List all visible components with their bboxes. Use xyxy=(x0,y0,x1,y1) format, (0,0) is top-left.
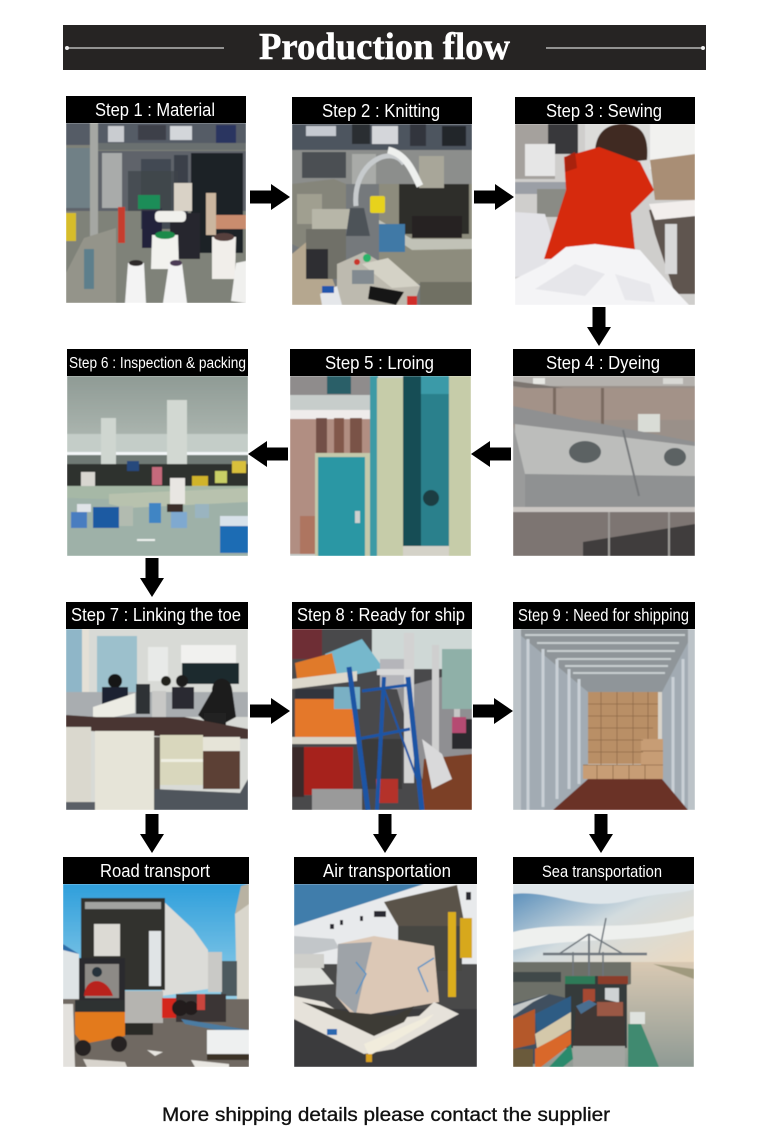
arrow: step 2 to step 3 xyxy=(474,184,514,210)
arrow: step 9 to sea transportation xyxy=(589,814,613,853)
panel: step 2 knitting: Step 2 : Knitting xyxy=(322,100,440,121)
panel: road transport: Road transport xyxy=(100,860,210,881)
title: Production flow xyxy=(259,26,511,68)
arrow: step 8 to step 9 xyxy=(473,698,513,724)
arrow: step 1 to step 2 xyxy=(250,184,290,210)
title banner xyxy=(63,25,706,70)
panel: step 5 lroing: Step 5 : Lroing xyxy=(325,352,434,373)
panel: step 6 inspection and packing: Step 6 : Inspection & packing xyxy=(69,355,246,372)
panel: step 5 lroing xyxy=(290,349,471,556)
panel: road transport xyxy=(63,857,249,1067)
panel: step 9 need for shipping: Step 9 : Need for shipping xyxy=(518,605,689,625)
arrow: step 8 to air transportation xyxy=(373,814,397,853)
panel: step 6 inspection and packing xyxy=(67,349,248,556)
panel: step 1 material xyxy=(66,96,246,303)
arrow: step 4 to step 5 xyxy=(471,441,511,467)
panel: step 8 ready for ship: Step 8 : Ready for ship xyxy=(297,604,465,625)
panel: step 3 sewing xyxy=(515,97,695,305)
panel: step 4 dyeing xyxy=(513,349,695,556)
panel: sea transportation: Sea transportation xyxy=(542,862,662,881)
panel: step 2 knitting xyxy=(292,97,472,305)
arrow: step 7 to step 8 xyxy=(250,698,290,724)
panel: sea transportation xyxy=(513,857,694,1067)
arrow: step 5 to step 6 xyxy=(248,441,288,467)
panel: step 7 linking the toe: Step 7 : Linking the toe xyxy=(71,604,241,625)
panel: step 1 material: Step 1 : Material xyxy=(95,99,215,120)
panel: step 8 ready for ship xyxy=(292,602,472,810)
panel: step 9 need for shipping xyxy=(513,602,695,810)
panel: step 7 linking the toe xyxy=(66,602,248,810)
panel: air transportation xyxy=(294,857,477,1067)
arrow: step 3 to step 4 xyxy=(587,307,611,346)
footer note: More shipping details please contact the supplier xyxy=(162,1104,611,1126)
panel: air transportation: Air transportation xyxy=(323,860,451,881)
panel: step 3 sewing: Step 3 : Sewing xyxy=(546,100,662,121)
arrow: step 7 to road transport xyxy=(140,814,164,853)
panel: step 4 dyeing: Step 4 : Dyeing xyxy=(546,352,660,373)
arrow: step 6 to step 7 xyxy=(140,558,164,597)
